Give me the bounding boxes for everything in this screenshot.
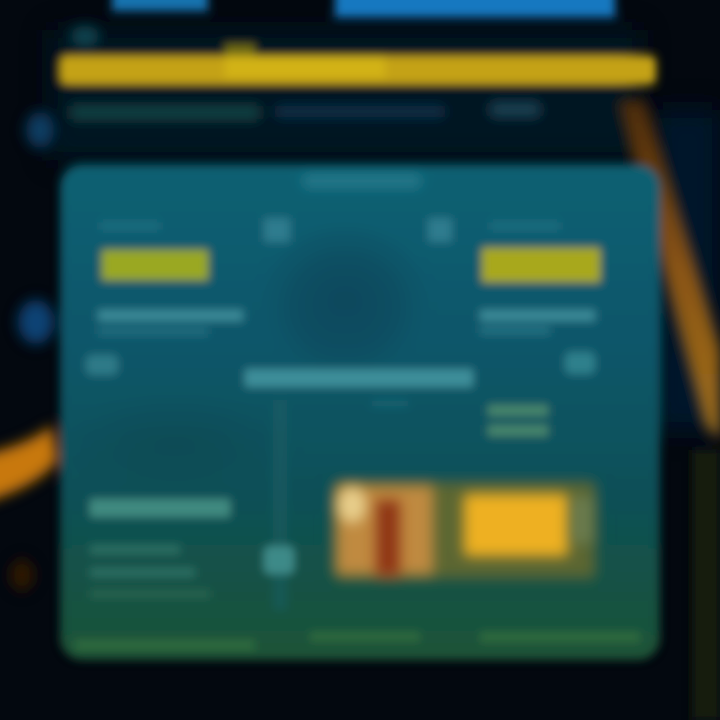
subtitle row: [70, 103, 540, 119]
orange blob left: [0, 425, 58, 591]
title band: [60, 44, 656, 84]
center lower icon: [264, 546, 294, 574]
icon: [565, 352, 595, 374]
icon: [86, 355, 118, 375]
stat value: [482, 248, 600, 282]
top icons: [264, 218, 452, 242]
footer row: [75, 632, 640, 650]
header backdrop: [50, 30, 640, 160]
dark lower band: [55, 390, 295, 500]
right stat: [480, 222, 600, 436]
right backdrop: [655, 110, 720, 430]
vertical divider glow: [273, 400, 287, 610]
left stat: [86, 222, 243, 375]
lower left text: [90, 499, 230, 598]
center dark circle: [260, 222, 430, 378]
small figure: [488, 405, 548, 436]
center text line: [245, 369, 473, 407]
image block: [335, 482, 595, 578]
orange diagonal beam: [618, 100, 720, 440]
stat description: [480, 310, 595, 334]
top blue bars: [112, 0, 615, 17]
panel heading: [303, 174, 421, 188]
bottom right olive block: [692, 450, 720, 720]
main panel: [55, 165, 660, 660]
stat value: [102, 250, 208, 280]
left side blue accents: [18, 26, 99, 344]
title highlights: [225, 56, 385, 78]
stat label: [490, 222, 560, 230]
stat description: [98, 310, 243, 335]
stat label: [100, 222, 160, 230]
